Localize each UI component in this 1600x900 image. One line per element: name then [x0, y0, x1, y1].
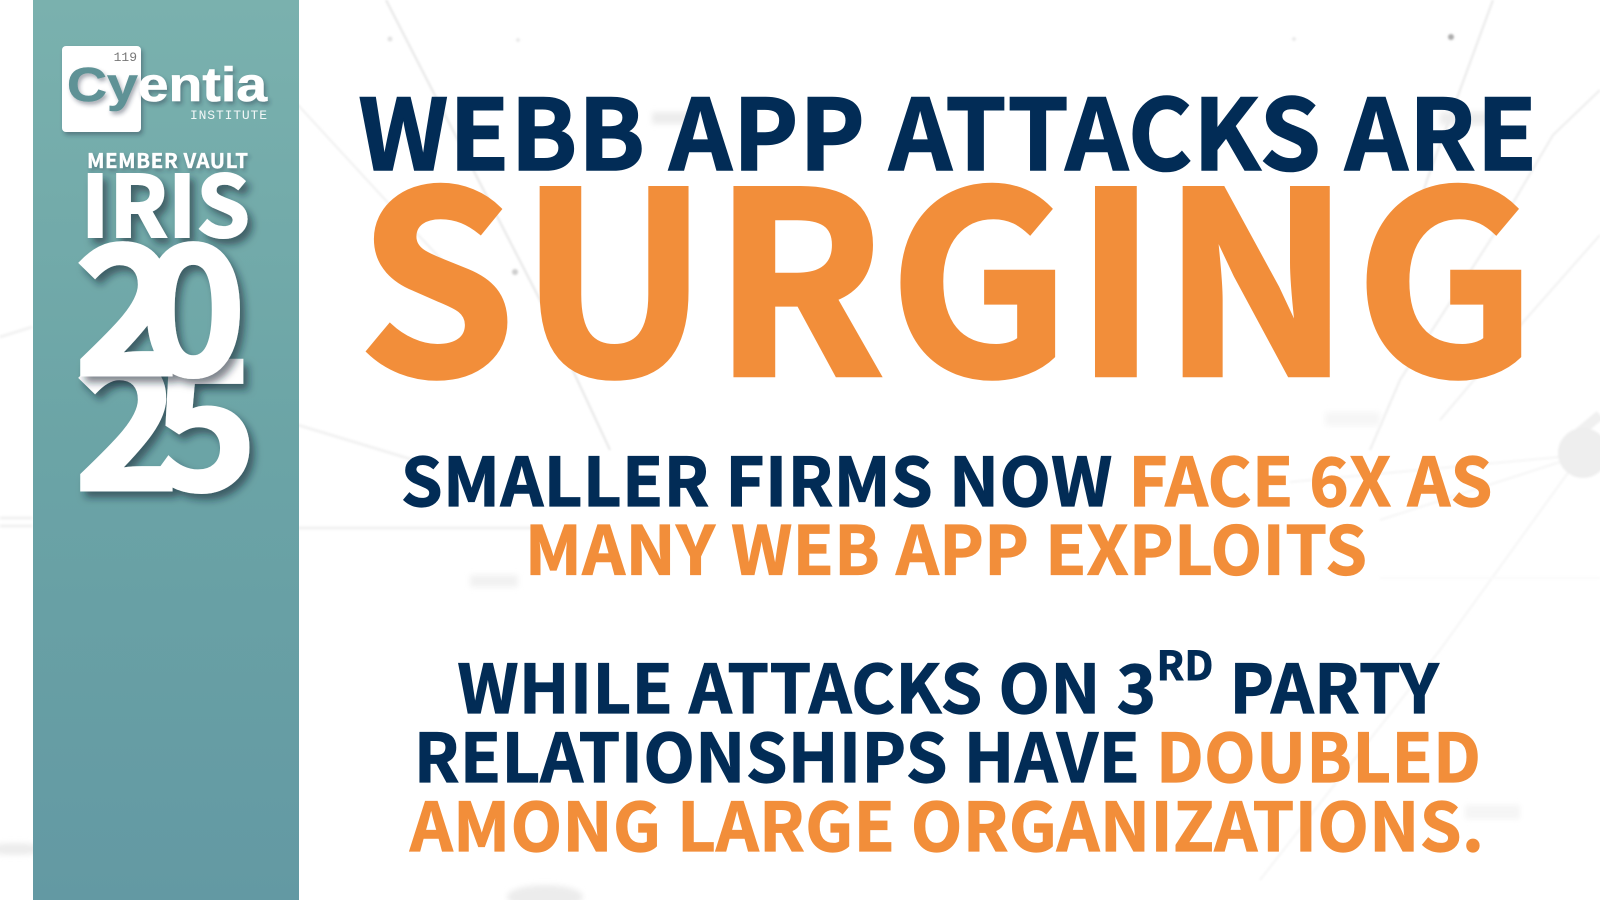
text block: third party: WHILE ATTACKS ON 3 [458, 637, 1157, 733]
text block: third party: RD [1157, 634, 1214, 692]
logo: Cyentia Institute: INSTITUTE [190, 108, 267, 123]
text block: smaller firms: MANY WEB APP EXPLOITS [525, 498, 1368, 594]
text block: third party: AMONG LARGE ORGANIZATIONS. [409, 775, 1484, 871]
panel: teal sidebar [33, 0, 299, 900]
text block: third party: PARTY [1214, 637, 1440, 733]
logo: Cyentia Institute: 119 [114, 50, 137, 65]
text block: third party [409, 634, 1484, 871]
heading: surging: SURGING [358, 83, 1540, 448]
text: member vault: MEMBER VAULT [87, 144, 248, 174]
text: year 20: 20 [74, 166, 239, 427]
logo: Cyentia Institute [62, 46, 267, 132]
text: year 25: 25 [74, 281, 249, 542]
text block: smaller firms: SMALLER FIRMS NOW FACE 6X AS [401, 430, 1493, 526]
text block: smaller firms [401, 430, 1493, 594]
logo: Cyentia Institute: Cyentia [67, 59, 267, 112]
heading: webb app attacks are: WEBB APP ATTACKS ARE [358, 57, 1538, 199]
text: IRIS: IRIS [81, 139, 250, 262]
text block: third party: RELATIONSHIPS HAVE DOUBLED [414, 706, 1481, 802]
